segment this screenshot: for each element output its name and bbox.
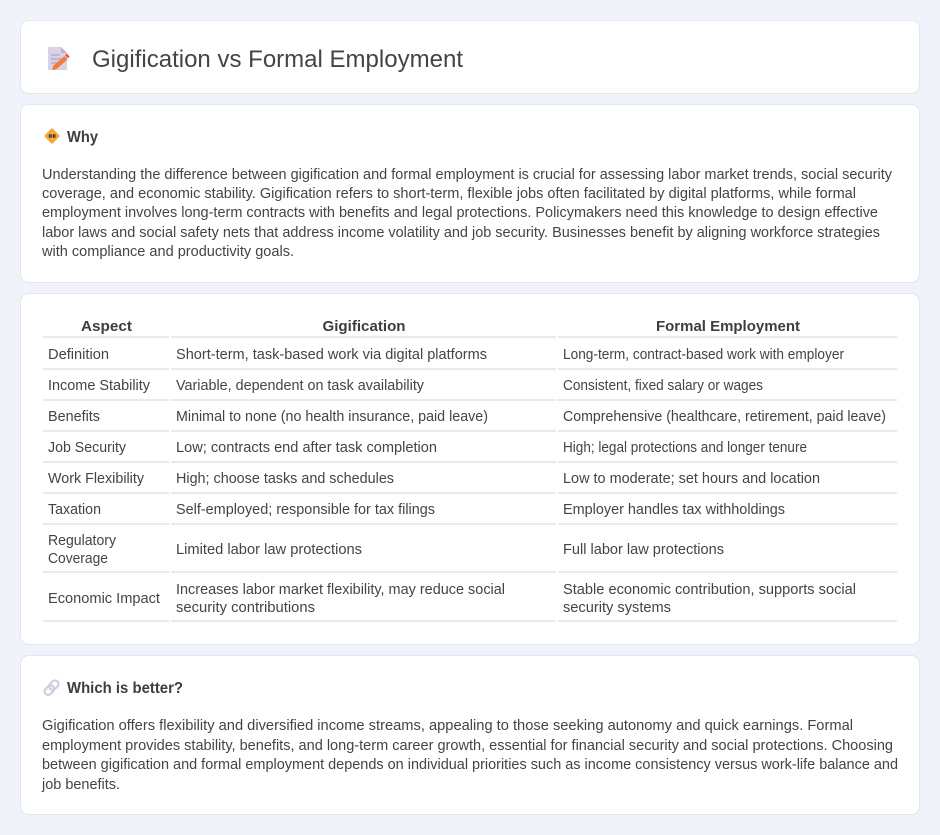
row: job security: Low; contracts end after task completion	[176, 440, 437, 456]
row: regulatory coverage	[48, 533, 724, 567]
row: regulatory coverage: Coverage	[48, 551, 108, 567]
row: income stability: Consistent, fixed salary or wages	[563, 378, 763, 394]
row: economic impact: security contributions	[176, 600, 315, 616]
row: job security	[48, 440, 807, 456]
text block: which is better paragraph: job benefits.	[41, 777, 120, 793]
table header	[81, 318, 800, 335]
row: benefits: Minimal to none (no health insurance, paid leave)	[176, 409, 488, 425]
row: taxation: Self-employed; responsible for tax filings	[176, 502, 435, 518]
row: taxation	[48, 502, 785, 518]
row: definition: Long-term, contract-based work with employer	[563, 347, 844, 363]
table header: Aspect	[81, 318, 132, 335]
row: definition: Short-term, task-based work via digital platforms	[176, 347, 487, 363]
icon: memo with pencil	[48, 47, 70, 70]
row: income stability: Variable, dependent on task availability	[176, 378, 425, 394]
panel: which is better	[20, 656, 920, 814]
row: income stability: Income Stability	[48, 378, 151, 394]
text block: which is better paragraph: Gigification offers flexibility and diversified income streams, appealing to those seeking autonomy and quick earnings. Formal	[42, 718, 853, 734]
row: regulatory coverage: Regulatory	[48, 533, 117, 549]
table header: Formal Employment	[656, 318, 800, 335]
panel: comparison table	[20, 294, 920, 644]
row: work flexibility: Low to moderate; set hours and location	[563, 471, 820, 487]
icon: link	[43, 679, 60, 696]
text block: which is better paragraph: between gigification and formal employment depends on individual priorities such as income consistency versus work-life balance and	[42, 757, 898, 773]
title: Gigification vs Formal Employment	[92, 46, 463, 73]
text block: which is better paragraph	[41, 718, 898, 793]
row: benefits	[48, 409, 886, 425]
row: benefits: Comprehensive (healthcare, retirement, paid leave)	[563, 409, 886, 425]
row: economic impact: Increases labor market flexibility, may reduce social	[176, 582, 505, 598]
row: job security: High; legal protections and longer tenure	[563, 440, 807, 456]
panel: title header	[20, 20, 920, 94]
row: work flexibility: Work Flexibility	[48, 471, 145, 487]
row: definition	[48, 347, 844, 363]
text block: why paragraph: labor laws and social safety nets that address income volatility and job security. Businesses benefit by aligning workforce strategies	[42, 225, 880, 241]
row: economic impact: Economic Impact	[48, 591, 160, 607]
row: economic impact: security systems	[563, 600, 671, 616]
row: income stability	[48, 378, 763, 394]
row: work flexibility	[48, 471, 820, 487]
row: job security: Job Security	[48, 440, 127, 456]
text block: why paragraph: coverage, and economic stability. Gigification refers to short-term, flexible jobs often facilitated by digital platforms, while formal	[42, 186, 856, 202]
row: work flexibility: High; choose tasks and schedules	[176, 471, 394, 487]
panel: why	[20, 104, 920, 282]
row: economic impact: Stable economic contribution, supports social	[563, 582, 856, 598]
table header: Gigification	[322, 318, 406, 335]
heading: which is better: Which is better?	[67, 680, 183, 697]
row: economic impact	[48, 582, 856, 616]
row: taxation: Taxation	[48, 502, 101, 518]
row: taxation: Employer handles tax withholdings	[563, 502, 785, 518]
text block: which is better paragraph: employment provides stability, benefits, and long-term career growth, essential for financial security and social protections. Choosing	[42, 738, 893, 754]
row: regulatory coverage: Full labor law protections	[563, 542, 724, 558]
text block: why paragraph	[41, 167, 893, 260]
heading: why: Why	[67, 129, 98, 146]
row: benefits: Benefits	[48, 409, 100, 425]
row: regulatory coverage: Limited labor law protections	[176, 542, 362, 558]
text block: why paragraph: with compliance and productivity goals.	[41, 244, 294, 260]
icon: warning diamond	[44, 128, 60, 144]
row: definition: Definition	[48, 347, 109, 363]
text block: why paragraph: employment involves long-term contracts with benefits and legal protections. Policymakers need this knowledge to design effective	[42, 205, 878, 221]
text block: why paragraph: Understanding the difference between gigification and formal employment is crucial for assessing labor market trends, social security	[42, 167, 893, 183]
